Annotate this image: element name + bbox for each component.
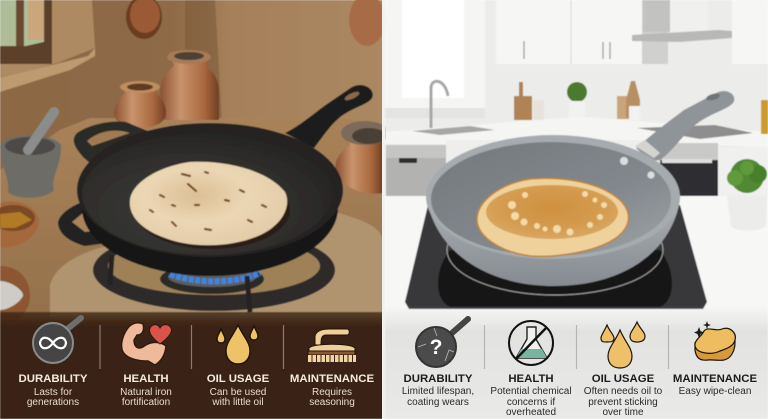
icon: sparkles — [694, 321, 711, 338]
lower cabinets — [446, 140, 768, 196]
text: oil usage — [584, 373, 663, 418]
text: durability — [402, 373, 474, 408]
roti — [130, 162, 290, 249]
text: maintenance: seasoning — [309, 397, 355, 408]
long handle — [285, 85, 373, 148]
text: oil usage: Can be used — [210, 387, 266, 398]
icon: wall pans — [126, 0, 385, 46]
text: health — [490, 373, 572, 418]
divider between panels — [382, 0, 385, 419]
text: oil usage: OIL USAGE — [207, 373, 270, 385]
text: health: HEALTH — [123, 373, 169, 385]
icon: muscle and heart — [122, 323, 171, 365]
range hood — [632, 0, 732, 42]
text: health: fortification — [122, 397, 170, 408]
panel: non-stick scene — [385, 0, 768, 419]
text: durability: DURABILITY — [19, 373, 88, 385]
column dividers — [484, 325, 668, 369]
icon: infinity skillet — [33, 318, 81, 363]
handle — [636, 91, 734, 160]
clay stove base — [50, 212, 382, 319]
text: health: overheated — [506, 407, 556, 418]
text: durability — [19, 373, 88, 408]
text: durability: Lasts for — [34, 387, 73, 398]
back counter — [385, 117, 768, 148]
icon: scrub brush — [308, 329, 356, 362]
body — [428, 205, 679, 286]
text: maintenance — [290, 373, 374, 408]
counter — [0, 118, 383, 320]
text: maintenance: Requires — [312, 387, 352, 398]
panel: cast iron attributes — [19, 318, 374, 408]
text: maintenance: MAINTENANCE — [673, 373, 757, 385]
column dividers — [100, 325, 284, 369]
copper pot small — [114, 81, 166, 128]
jar — [533, 100, 544, 120]
dishwasher — [386, 145, 446, 196]
copper pot large — [160, 50, 219, 120]
upper cabinets — [496, 0, 768, 64]
text: oil usage: over time — [602, 407, 644, 418]
text: health: HEALTH — [508, 373, 554, 385]
text: maintenance: Easy wipe-clean — [679, 386, 751, 397]
window — [0, 0, 52, 64]
faucet and sink — [431, 81, 448, 128]
icon: oil drops — [601, 322, 645, 368]
wall recess — [0, 0, 95, 80]
window — [385, 0, 485, 118]
bottom loop handle — [58, 203, 130, 246]
text: durability: generations — [27, 397, 79, 408]
oven — [660, 143, 718, 196]
cast iron skillet — [58, 85, 373, 276]
text: durability: DURABILITY — [404, 373, 473, 385]
spice bowl — [0, 201, 39, 248]
text: oil usage — [207, 373, 270, 408]
white island counter — [385, 196, 768, 419]
rivets — [620, 157, 628, 165]
icon: sponge — [695, 328, 735, 360]
gas burner — [93, 229, 335, 312]
text: maintenance — [673, 373, 757, 397]
bottom band right — [385, 306, 768, 419]
icon: oil drops — [217, 325, 258, 364]
text: health — [120, 373, 172, 408]
text: health: Potential chemical — [490, 386, 572, 397]
mortar and pestle — [0, 112, 61, 198]
icon: cracked skillet — [416, 319, 468, 367]
small plant — [567, 82, 587, 117]
non-stick pan — [426, 91, 734, 286]
panel: cast iron scene — [0, 0, 389, 419]
text: oil usage: OIL USAGE — [592, 373, 655, 385]
text: oil usage: prevent sticking — [588, 397, 658, 408]
icon: cracked skillet: ? — [430, 336, 442, 359]
top loop handle — [74, 121, 150, 168]
salt bowl — [0, 266, 30, 330]
body — [82, 140, 338, 276]
icon: no chemicals — [509, 321, 553, 365]
text: health: concerns if — [507, 397, 555, 408]
text: oil usage: with little oil — [211, 397, 264, 408]
bottom band left — [0, 312, 383, 419]
utensils — [617, 81, 640, 121]
text: durability: coating wears — [407, 397, 469, 408]
cutting board — [514, 82, 532, 120]
back hob — [637, 125, 753, 139]
panel: non-stick attributes — [402, 319, 757, 418]
text: maintenance: MAINTENANCE — [290, 373, 374, 385]
text: durability: Limited lifespan, — [402, 386, 474, 397]
text: health: Natural iron — [120, 387, 172, 398]
oil bottle — [761, 100, 768, 134]
induction cooktop — [405, 205, 707, 309]
potted herb — [727, 159, 767, 230]
text: oil usage: Often needs oil to — [584, 386, 663, 397]
pancake — [477, 178, 629, 256]
copper pot right — [336, 121, 389, 194]
